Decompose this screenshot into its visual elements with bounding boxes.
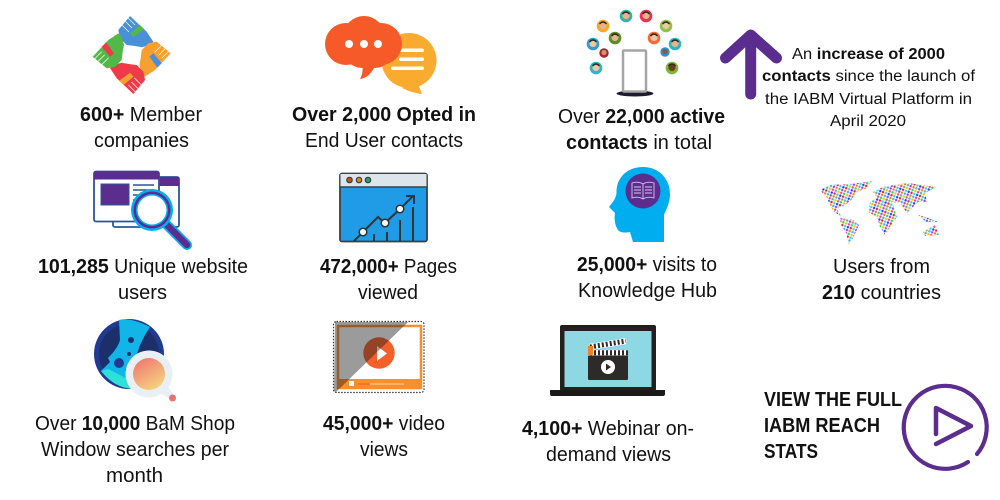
- text: 45,000+ video views: 45,000+ video: [323, 413, 445, 435]
- text: Over 22,000 active contacts: Over 22,000 active: [558, 106, 725, 128]
- text: 472,000+ Pages viewed: viewed: [358, 282, 418, 304]
- icon: play button: [904, 386, 987, 469]
- text: view the full IABM reach stats: STATS: [764, 441, 818, 463]
- icon: dotted world map: [820, 181, 939, 245]
- text: Over 10,000 BaM Shop Window searches per month: Over 10,000 BaM Shop: [35, 413, 235, 435]
- text: increase of 2000 contacts: the IABM Virtual Platform in: [765, 91, 972, 108]
- icon: up arrow: [726, 35, 776, 94]
- text: Over 10,000 BaM Shop Window searches per month: [35, 413, 235, 487]
- icon: laptop with clapperboard: [550, 325, 665, 396]
- text: Users from 210 countries: Users from: [833, 256, 930, 278]
- icon: phone with contacts: [587, 10, 681, 97]
- text: 101,285 Unique website users: [38, 256, 248, 304]
- icon: four linked hands: [93, 16, 171, 94]
- text: view the full IABM reach stats: [764, 389, 902, 463]
- text: Over 2,000 Opted in: [292, 104, 476, 152]
- text: 4,100+ Webinar on-demand views: demand views: [546, 444, 671, 466]
- text: 4,100+ Webinar on-demand views: 4,100+ Webinar on-: [522, 418, 694, 440]
- text: Over 10,000 BaM Shop Window searches per month: Window searches per: [41, 439, 229, 461]
- icon: head with book: [609, 167, 670, 242]
- icon: browser windows with magnifier: [94, 172, 187, 245]
- text: 600+ Member companies: companies: [94, 130, 189, 152]
- text: increase of 2000 contacts: An increase of 2000: [792, 46, 945, 63]
- icon: video player: [334, 322, 424, 392]
- text: Users from 210 countries: 210 countries: [822, 282, 941, 304]
- text: Over 22,000 active contacts: [558, 106, 725, 154]
- text: Over 2,000 Opted in: End User contacts: [305, 130, 463, 152]
- text: 4,100+ Webinar on-demand views: [522, 418, 694, 466]
- text: 600+ Member companies: 600+ Member: [80, 104, 202, 126]
- text: 101,285 Unique website users: users: [118, 282, 167, 304]
- icon: speech bubbles: [325, 16, 436, 94]
- text: view the full IABM reach stats: IABM REACH: [764, 415, 880, 437]
- text: Over 2,000 Opted in: Over 2,000 Opted in: [292, 104, 476, 126]
- text: 101,285 Unique website users: 101,285 Unique website: [38, 256, 248, 278]
- text: view the full IABM reach stats: VIEW THE FULL: [764, 389, 902, 411]
- icon: globe with magnifier: [94, 319, 176, 402]
- text: Over 22,000 active contacts: contacts in total: [566, 132, 712, 154]
- text: increase of 2000 contacts: contacts since the launch of: [762, 68, 976, 85]
- text: increase of 2000 contacts: [762, 46, 976, 130]
- text: Over 10,000 BaM Shop Window searches per month: month: [106, 465, 163, 487]
- text: 45,000+ video views: [323, 413, 445, 461]
- icon: browser with growth chart: [340, 174, 427, 242]
- text: 25,000+ visits to Knowledge Hub: [577, 254, 717, 302]
- text: increase of 2000 contacts: April 2020: [830, 113, 906, 130]
- text: Users from 210 countries: [822, 256, 941, 304]
- text: 472,000+ Pages viewed: [320, 256, 457, 304]
- text: 45,000+ video views: views: [360, 439, 408, 461]
- text: 25,000+ visits to Knowledge Hub: Knowledge Hub: [578, 280, 717, 302]
- text: 472,000+ Pages viewed: 472,000+ Pages: [320, 256, 457, 278]
- text: 25,000+ visits to Knowledge Hub: 25,000+ visits to: [577, 254, 717, 276]
- text: 600+ Member companies: [80, 104, 202, 152]
